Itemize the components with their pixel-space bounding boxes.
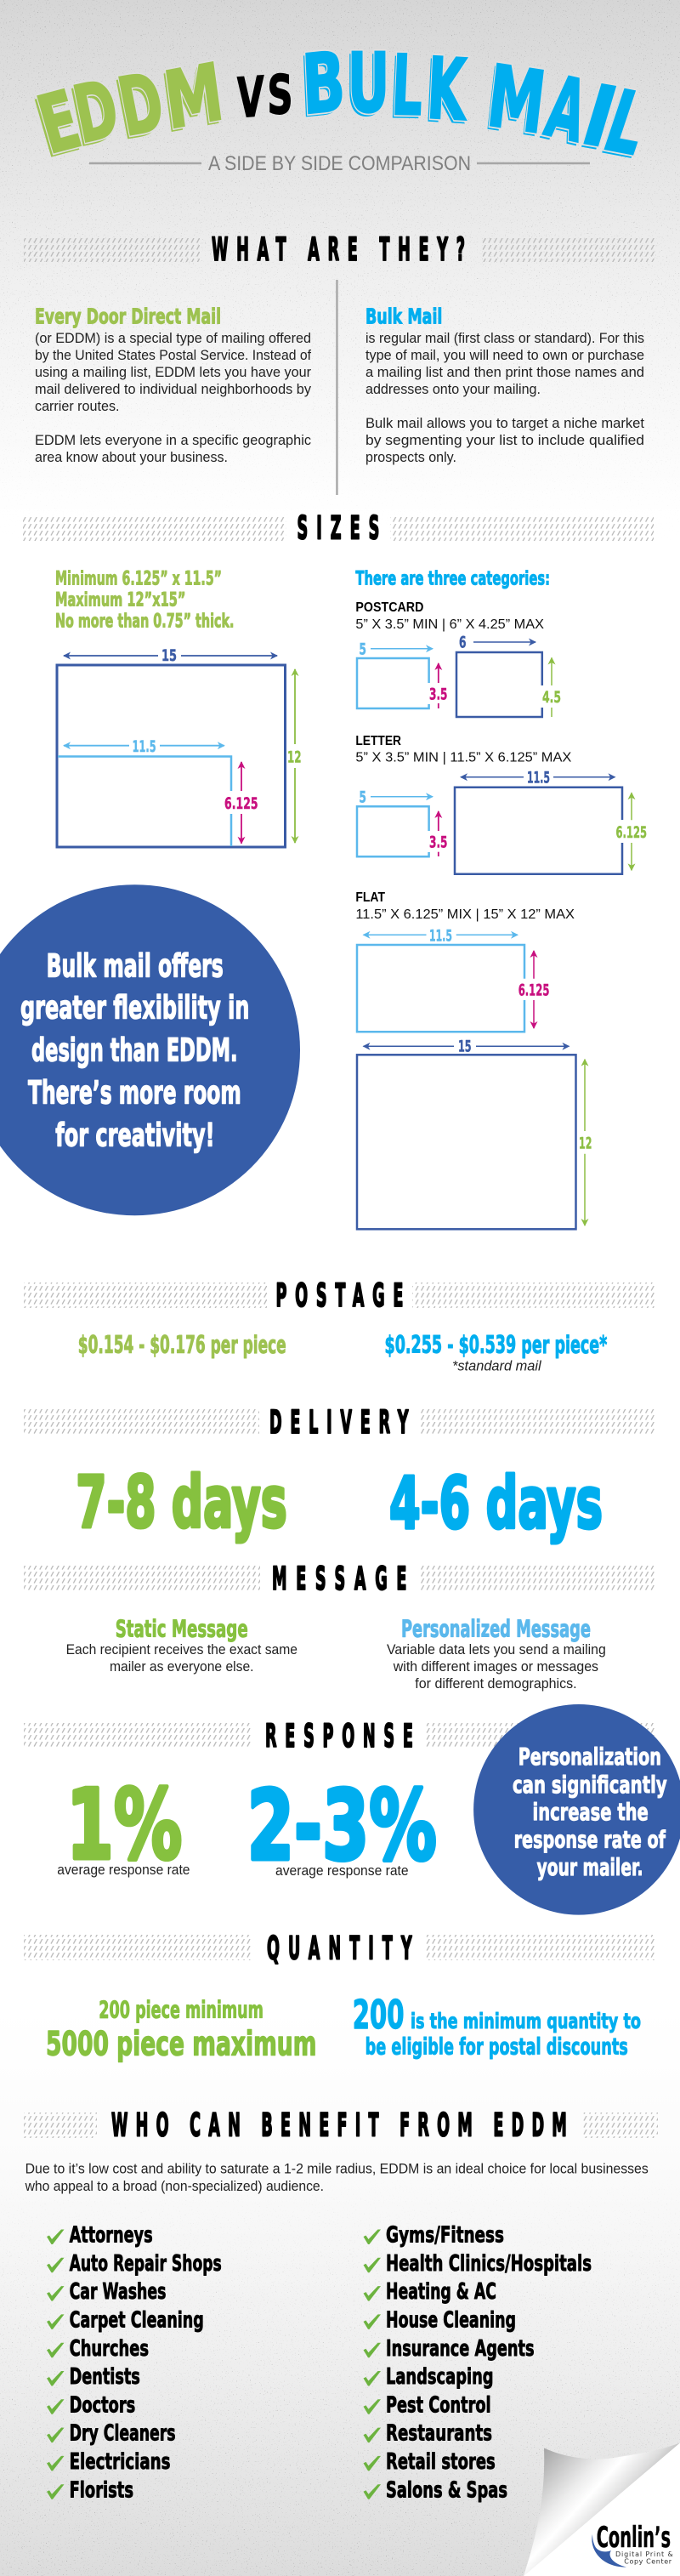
title word: EDDM: D <box>67 64 126 162</box>
title word: BULK MAIL: K <box>425 40 470 140</box>
heading: response: RESPONSE <box>265 1717 413 1754</box>
text block: who can benefit intro: Due to it’s low cost and ability to saturate a 1-2 mile radius, EDDM is an ideal choice for local businesses <box>26 2162 649 2177</box>
heading: delivery <box>24 1403 654 1441</box>
personalized message <box>387 1616 606 1692</box>
list: businesses, right column: Heating & AC <box>386 2279 496 2305</box>
diagram: postcard sizes <box>357 634 561 717</box>
EDDM quantity: 200 piece minimum <box>99 1997 264 2023</box>
subheading: bulk mail: Bulk Mail <box>366 304 442 329</box>
list: businesses, left column: Dentists <box>70 2364 140 2390</box>
callout: personalization <box>473 1704 680 1915</box>
text block: bulk mail description: Bulk mail allows you to target a niche market <box>366 416 644 431</box>
title word: BULK MAIL: A <box>538 58 595 162</box>
title word: BULK MAIL: M <box>480 50 548 156</box>
title word: BULK MAIL: B <box>300 34 347 134</box>
title word: BULK MAIL: A <box>538 58 595 162</box>
callout: bulk mail flexibility: greater flexibility in <box>20 989 249 1026</box>
text block: EDDM description <box>35 331 312 465</box>
diagram: flat sizes: 11.5 <box>429 927 452 946</box>
logo: Conlin's: Copy Center <box>624 2557 672 2565</box>
title word: BULK MAIL: B <box>300 34 347 134</box>
list: businesses, right column: House Cleaning <box>386 2308 516 2334</box>
heading: sizes <box>23 509 654 546</box>
static message: Static Message <box>116 1616 248 1642</box>
panel: EDDM definition <box>35 304 312 465</box>
panel: response rates <box>57 1769 437 1882</box>
callout: bulk mail flexibility: design than EDDM. <box>31 1032 238 1069</box>
text block: bulk mail description <box>366 331 644 465</box>
static message: Each recipient receives the exact same <box>66 1642 298 1658</box>
text block: EDDM description: carrier routes. <box>35 399 119 414</box>
title word: BULK MAIL: U <box>348 35 389 131</box>
diagram: postcard sizes: 4.5 <box>542 688 561 707</box>
list: businesses, left column: Electricians <box>70 2449 170 2475</box>
text block: postcard: POSTCARD <box>355 600 423 615</box>
static message: mailer as everyone else. <box>110 1659 253 1675</box>
title word: EDDM: E <box>28 72 90 172</box>
heading: response <box>24 1717 654 1754</box>
title word: BULK MAIL: L <box>593 73 660 174</box>
personalized message: for different demographics. <box>415 1676 577 1692</box>
diagram: flat sizes <box>357 927 592 1229</box>
text block: EDDM size rules: Minimum 6.125” x 11.5” <box>55 567 222 589</box>
list: businesses, left column: Churches <box>70 2336 149 2362</box>
diagram: EDDM maximum and minimum size: 6.125 <box>224 794 258 813</box>
panel: postage prices <box>78 1331 607 1374</box>
text block: bulk mail description: by segmenting your list to include qualified <box>366 433 644 448</box>
title word: EDDM: M <box>160 47 229 148</box>
panel: bulk mail size categories <box>355 567 647 1229</box>
list: businesses, left column: Attorneys <box>70 2223 153 2249</box>
title word: BULK MAIL <box>298 34 660 178</box>
diagram: letter sizes: 6.125 <box>615 823 647 842</box>
personalized message: with different images or messages <box>393 1659 598 1675</box>
title word: BULK MAIL: M <box>483 48 550 154</box>
title word: vs: V <box>237 65 264 131</box>
subtitle: A SIDE BY SIDE COMPARISON <box>208 152 471 175</box>
EDDM response rate: 1% <box>66 1769 182 1881</box>
logo swoosh <box>592 2534 626 2567</box>
page curl <box>524 2442 680 2576</box>
list: businesses, right column: Retail stores <box>386 2449 496 2475</box>
list: businesses, right column <box>364 2223 592 2503</box>
heading: postage: POSTAGE <box>275 1277 403 1314</box>
title word: BULK MAIL: K <box>425 40 470 140</box>
personalized message: Variable data lets you send a mailing <box>387 1642 606 1658</box>
list: businesses, right column: Salons & Spas <box>386 2477 507 2503</box>
diagram: EDDM maximum and minimum size: 15 <box>162 646 177 665</box>
title word: BULK MAIL: M <box>483 48 550 154</box>
diagram: postcard sizes: 5 <box>359 640 366 658</box>
title word: EDDM: D <box>109 60 169 157</box>
heading: quantity: QUANTITY <box>267 1930 412 1966</box>
title <box>26 34 660 178</box>
list: businesses, left column: Carpet Cleaning <box>70 2308 204 2334</box>
title word: EDDM: M <box>160 47 229 148</box>
heading: message: MESSAGE <box>272 1560 406 1597</box>
title word: EDDM: E <box>28 72 90 172</box>
title word: BULK MAIL: A <box>536 61 593 165</box>
list: businesses, right column: Gyms/Fitness <box>386 2223 504 2249</box>
panel: message comparison <box>66 1616 606 1692</box>
text block: EDDM description: EDDM lets everyone in a specific geographic <box>35 433 311 448</box>
callout: bulk mail flexibility <box>0 884 300 1215</box>
footnote: standard mail: *standard mail <box>452 1359 542 1374</box>
heading: postage <box>24 1277 654 1314</box>
text block: postcard: 5” X 3.5” MIN | 6” X 4.25” MAX <box>355 617 545 632</box>
EDDM delivery time: 7-8 days <box>76 1461 287 1544</box>
subheading: every door direct mail: Every Door Direct Mail <box>35 304 221 329</box>
diagram: letter sizes <box>357 769 647 874</box>
list: businesses, left column: Florists <box>70 2477 133 2503</box>
title word: BULK MAIL: L <box>390 37 425 134</box>
logo: Conlin's <box>592 2521 673 2567</box>
text block: EDDM description: mail delivered to individual neighborhoods by <box>35 382 312 397</box>
heading: quantity <box>24 1930 654 1966</box>
text block: flat: FLAT <box>355 890 385 905</box>
title word: vs <box>237 63 293 131</box>
diagram: postcard sizes: 3.5 <box>429 685 447 703</box>
text block: flat <box>355 890 575 922</box>
list: businesses, right column: Insurance Agents <box>386 2336 535 2362</box>
heading: who can benefit: WHO CAN BENEFIT FROM EDDM <box>111 2107 567 2144</box>
text block: EDDM description: area know about your business. <box>35 450 228 465</box>
list: businesses, right column: Pest Control <box>386 2392 491 2418</box>
title word: EDDM: D <box>65 67 123 165</box>
title word: BULK MAIL: L <box>390 37 425 134</box>
list: businesses, right column: Restaurants <box>386 2421 492 2447</box>
EDDM postage: $0.154 - $0.176 per piece <box>78 1331 286 1359</box>
title word: EDDM: E <box>26 76 88 175</box>
panel: EDDM size limits <box>55 567 303 847</box>
heading: what are they <box>24 230 655 268</box>
text block: who can benefit intro: who appeal to a broad (non-specialized) audience. <box>25 2179 324 2194</box>
diagram: postcard sizes: 6 <box>459 634 466 652</box>
text block: letter <box>355 734 572 765</box>
title word: EDDM <box>26 47 229 175</box>
text block: letter: 5” X 3.5” MIN | 11.5” X 6.125” MAX <box>355 751 572 765</box>
text block: postcard <box>355 600 545 632</box>
static message <box>66 1616 298 1675</box>
text block: who can benefit intro <box>25 2162 649 2194</box>
callout: bulk mail flexibility: for creativity! <box>55 1117 215 1154</box>
text block: EDDM description: (or EDDM) is a special type of mailing offered <box>35 331 311 346</box>
title word: BULK MAIL: U <box>348 35 389 131</box>
title word: BULK MAIL: I <box>572 67 626 166</box>
bulk mail response rate: 2-3% <box>247 1770 437 1882</box>
EDDM response rate: average response rate <box>57 1862 190 1878</box>
list: businesses, right column: Health Clinics/Hospitals <box>386 2251 592 2277</box>
list: businesses, left column: Dry Cleaners <box>70 2421 176 2447</box>
title word: EDDM: D <box>111 56 171 154</box>
text block: EDDM size rules: Maximum 12”x15” <box>55 589 185 611</box>
title word: BULK MAIL: L <box>388 40 422 137</box>
diagram: EDDM maximum and minimum size: 12 <box>287 748 302 767</box>
logo tagline: Digital Print & <box>615 2550 673 2558</box>
diagram: letter sizes: 11.5 <box>527 769 550 788</box>
title word: EDDM: M <box>157 50 226 151</box>
EDDM quantity: 5000 piece maximum <box>46 2026 316 2064</box>
diagram: EDDM maximum and minimum size: 11.5 <box>133 737 156 756</box>
text block: EDDM size rules: No more than 0.75” thick. <box>55 610 235 632</box>
heading: delivery: DELIVERY <box>269 1403 409 1441</box>
text block: bulk mail description: type of mail, you will need to own or purchase <box>366 348 644 363</box>
diagram: letter sizes: 5 <box>359 788 366 806</box>
diagram: letter sizes: 3.5 <box>429 833 447 852</box>
list: businesses, left column: Auto Repair Shops <box>70 2251 222 2277</box>
list: businesses, left column <box>47 2223 222 2503</box>
text block: bulk mail description: addresses onto your mailing. <box>366 382 541 397</box>
diagram: flat sizes: 15 <box>458 1038 472 1056</box>
panel: bulk mail definition <box>366 304 644 465</box>
title word: BULK MAIL: B <box>298 37 345 136</box>
title word: BULK MAIL: U <box>345 38 388 134</box>
title word: EDDM: D <box>67 64 126 162</box>
title word: BULK MAIL: I <box>570 71 625 169</box>
title word: BULK MAIL: L <box>593 73 660 174</box>
bulk mail response rate: average response rate <box>275 1863 409 1879</box>
diagram: flat sizes: 6.125 <box>518 981 549 1000</box>
text block: bulk mail description: prospects only. <box>366 450 456 465</box>
callout: bulk mail flexibility: There’s more room <box>28 1074 241 1112</box>
title word: BULK MAIL: L <box>591 76 657 178</box>
heading: sizes: SIZES <box>298 509 379 546</box>
text block: EDDM size rules <box>55 567 235 632</box>
text block: EDDM description: using a mailing list, EDDM lets you have your <box>35 365 311 380</box>
list: businesses, right column: Landscaping <box>386 2364 494 2390</box>
EDDM quantity <box>46 1997 316 2064</box>
title word: vs: S <box>267 63 293 127</box>
bulk mail quantity <box>353 1992 641 2061</box>
bulk mail quantity: 200 <box>353 1992 405 2038</box>
text block: letter: LETTER <box>355 734 401 748</box>
panel: quantity limits <box>46 1992 641 2064</box>
heading: what are they: WHAT ARE THEY? <box>212 230 465 268</box>
heading: message <box>24 1560 654 1597</box>
subheading: three categories: There are three categories: <box>355 567 550 589</box>
text block: bulk mail description: is regular mail (first class or standard). For this <box>366 331 644 346</box>
text block: EDDM description: by the United States Postal Service. Instead of <box>35 348 311 363</box>
callout: bulk mail flexibility: Bulk mail offers <box>47 947 224 984</box>
diagram: EDDM maximum and minimum size <box>57 646 303 847</box>
title word: EDDM: D <box>111 56 171 154</box>
list: businesses, left column: Doctors <box>70 2392 135 2418</box>
title word: BULK MAIL: K <box>423 43 468 144</box>
text block: bulk mail description: a mailing list and then print those names and <box>366 365 644 380</box>
title word: BULK MAIL: I <box>572 67 626 166</box>
text block: flat: 11.5” X 6.125” MIX | 15” X 12” MAX <box>355 907 575 922</box>
panel: delivery times <box>76 1461 603 1545</box>
list: businesses, left column: Car Washes <box>70 2279 166 2305</box>
diagram: flat sizes: 12 <box>579 1134 592 1153</box>
